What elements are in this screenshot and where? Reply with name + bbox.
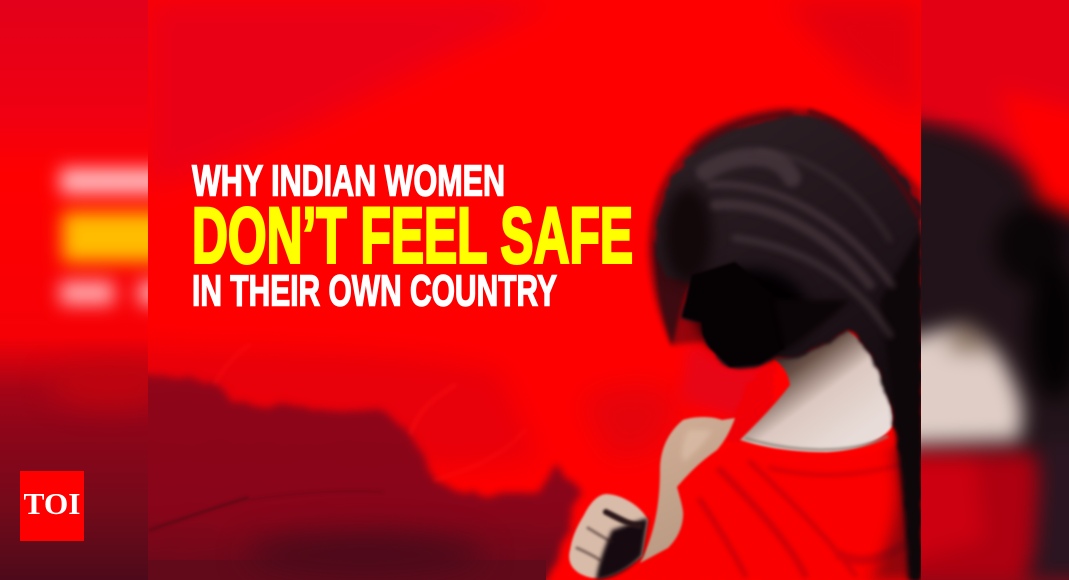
title line 1: WHY INDIAN WOMEN <box>192 156 505 206</box>
red background <box>148 0 921 580</box>
hair haze <box>648 108 921 345</box>
forearm highlight <box>682 430 710 460</box>
mid smoke wash <box>130 345 540 470</box>
neck hair shadow <box>782 300 846 333</box>
flyaway hair strokes <box>695 112 918 215</box>
clenched hand <box>569 494 648 580</box>
dark brush strokes lower left <box>150 491 382 530</box>
hair and face silhouette <box>655 116 921 580</box>
profile sharp edge <box>682 262 785 367</box>
title line 2: DON’T FEEL SAFE <box>192 190 633 280</box>
neck and shoulder <box>740 330 893 452</box>
dark hair by forehead <box>664 187 712 283</box>
title line 3: IN THEIR OWN COUNTRY <box>192 266 557 316</box>
TOI logo <box>20 471 84 541</box>
right blurred side panel <box>921 0 1069 580</box>
hair highlight strands <box>705 150 892 335</box>
face shadow <box>696 268 808 356</box>
crimson wash near face <box>680 344 766 418</box>
shoulder shadow line <box>745 436 888 450</box>
dark lower background <box>130 368 581 580</box>
dark hair right <box>880 230 921 580</box>
darkest bottom pool <box>245 531 485 579</box>
darker wash behind arm <box>580 385 680 460</box>
top right darker wash <box>790 0 921 116</box>
top left darker wash <box>148 0 560 190</box>
left blurred side panel <box>0 0 148 580</box>
title block <box>192 156 633 316</box>
central illustration <box>130 0 921 580</box>
dark fill to the frame bottom <box>148 560 546 580</box>
forearm <box>640 417 735 563</box>
hair lock <box>654 240 692 346</box>
smoke wisps <box>214 380 440 482</box>
red wrapped cloth <box>695 366 921 580</box>
woman figure <box>569 108 921 580</box>
TOI logo: TOI <box>24 486 80 521</box>
